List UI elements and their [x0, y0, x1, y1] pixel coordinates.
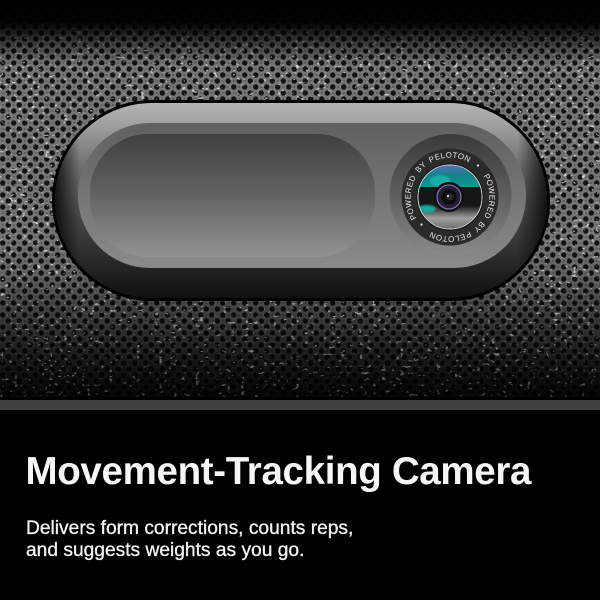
title: Movement-Tracking Camera: [26, 450, 531, 493]
lens assembly: [390, 134, 512, 246]
raised top plate: [78, 123, 526, 268]
product photo: camera on fabric bar: [0, 23, 600, 410]
lens ring text: POWERED BY PELOTON: [405, 152, 470, 220]
description text: [26, 518, 353, 561]
lens glass: [416, 164, 484, 230]
bottom edge strip: [0, 400, 600, 410]
fabric background: [0, 0, 600, 397]
lens ring text: POWERED BY PELOTON: [430, 174, 495, 242]
camera housing: [52, 100, 550, 301]
description text: Delivers form corrections, counts reps,: [26, 518, 353, 539]
recessed panel: [90, 134, 375, 257]
description text: and suggests weights as you go.: [26, 540, 304, 561]
lens ring text: [405, 152, 495, 242]
